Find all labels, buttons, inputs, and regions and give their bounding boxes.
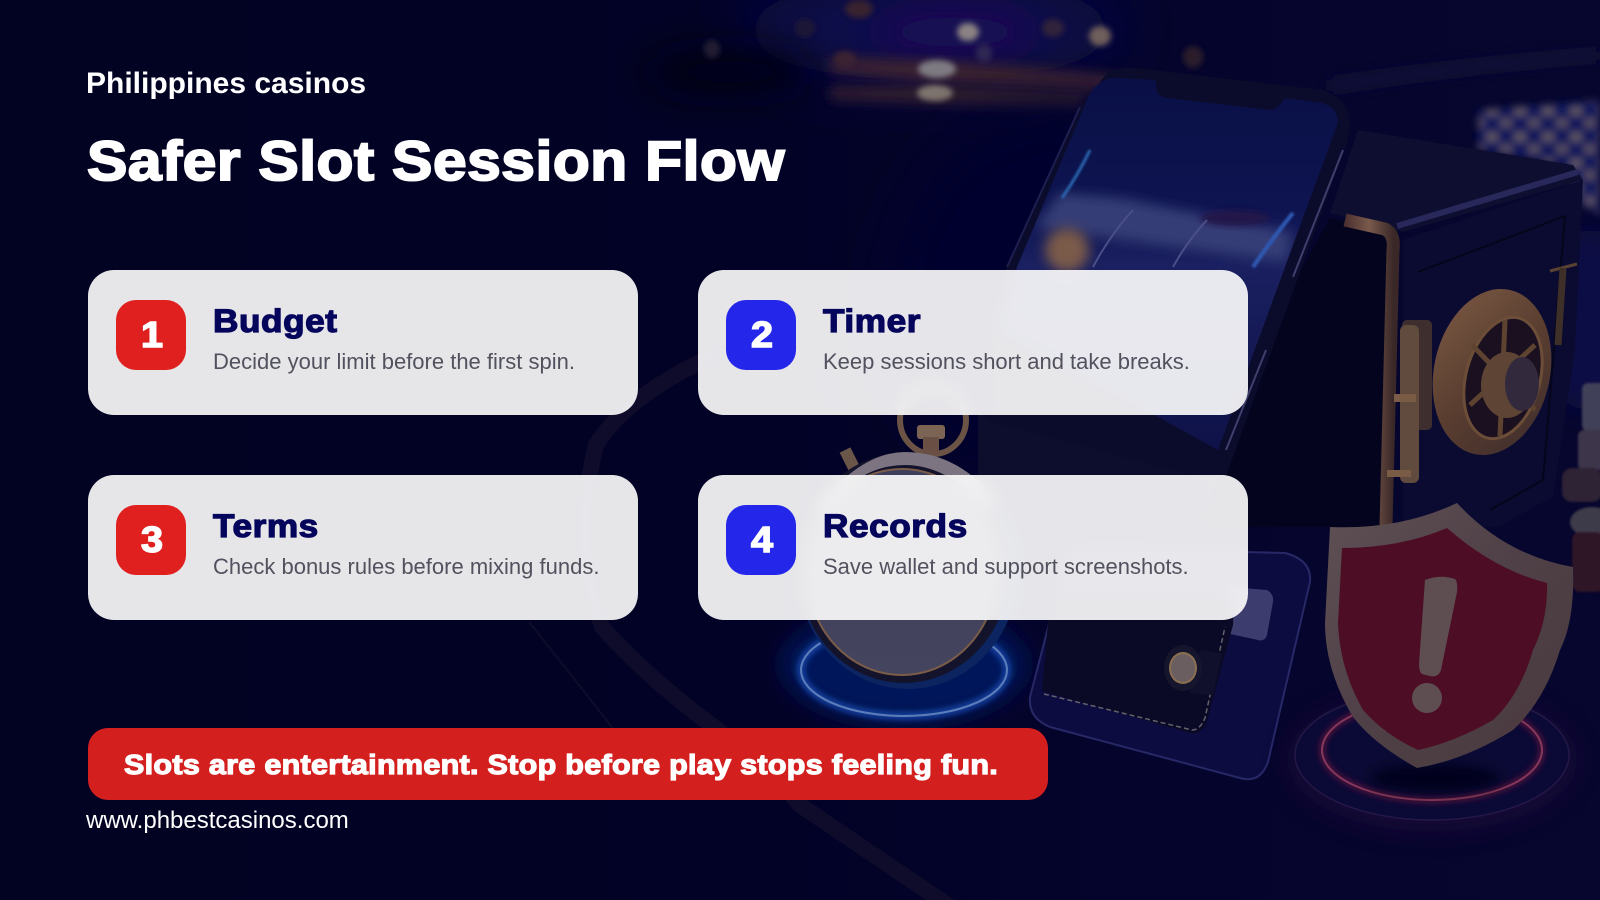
badge 3 [116,505,186,575]
heading: Timer: Timer [823,303,921,339]
icon: safe [1200,130,1583,527]
website url: www.phbestcasinos.com [86,807,349,834]
icon: wallet [1030,548,1310,779]
description: Timer: Keep sessions short and take breaks. [823,349,1190,374]
table arcs [530,353,955,900]
badge 3: 3 [141,519,163,560]
badge 1 [116,300,186,370]
icon: warning shield [1287,503,1577,832]
badge 4: 4 [751,519,773,560]
blurred casino lights [645,0,1600,410]
badge 1: 1 [141,314,163,355]
banner text: Slots are entertainment. Stop before play stops feeling fun. [124,749,998,780]
description: Budget: Decide your limit before the first spin. [213,349,575,374]
badge 4 [726,505,796,575]
card: Records [698,475,1248,620]
icon: chip stacks [1478,100,1600,592]
heading: Budget: Budget [213,303,338,339]
badge 2: 2 [751,314,773,355]
description: Terms: Check bonus rules before mixing funds. [213,554,599,579]
background scene [529,0,1600,900]
description: Records: Save wallet and support screenshots. [823,554,1189,579]
title: Safer Slot Session Flow [87,129,785,192]
heading: Terms: Terms [213,508,319,544]
badge 2 [726,300,796,370]
icon: stopwatch [782,386,1026,723]
card: Budget [88,270,638,415]
subtitle: Philippines casinos [86,67,366,100]
heading: Records: Records [823,508,968,544]
card: Timer [698,270,1248,415]
right glow [890,110,1230,490]
icon: smartphone [978,72,1344,475]
warning banner [88,728,1048,800]
card: Terms [88,475,638,620]
